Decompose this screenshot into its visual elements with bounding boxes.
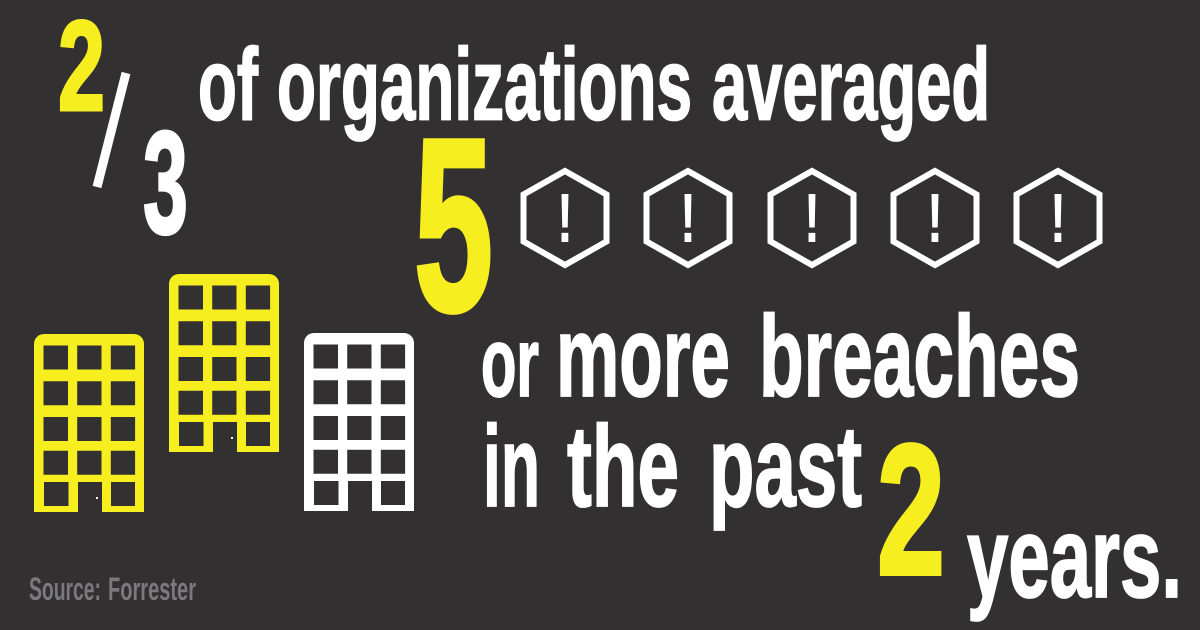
text: in the past: past — [709, 403, 862, 531]
headline: of organizations averaged: of — [198, 28, 259, 142]
icon: alert hexagon 4 — [894, 171, 976, 265]
big number 2: 2 — [877, 407, 945, 614]
icon: alert hexagon 5 — [1016, 171, 1100, 265]
icon: alert hexagon 5: ! — [1050, 179, 1066, 257]
icon: alert hexagon 2: ! — [680, 179, 696, 257]
icon: alert hexagon 4: ! — [927, 179, 943, 257]
icon: yellow building left — [34, 334, 144, 512]
text: more breaches: more — [556, 293, 730, 421]
icon: alert hexagon 2 — [646, 171, 730, 265]
text: or: or — [481, 307, 539, 417]
icon: alert hexagon 1: ! — [557, 179, 573, 257]
icon: white building — [304, 333, 414, 511]
icon: alert hexagon 3: ! — [804, 179, 820, 257]
source credit: Forrester — [108, 571, 196, 607]
fraction two thirds — [58, 0, 188, 264]
breach alert icons — [524, 171, 1100, 265]
headline: of organizations averaged: organizations — [277, 28, 692, 142]
big number 5: 5 — [414, 88, 493, 363]
text: more breaches — [556, 293, 1080, 421]
icon: alert hexagon 3 — [770, 171, 854, 265]
icon: yellow building middle — [169, 274, 279, 452]
icon: alert hexagon 1 — [524, 171, 606, 265]
headline: of organizations averaged: averaged — [712, 28, 990, 142]
text: in the past: in — [483, 403, 540, 531]
source credit: Source: — [29, 571, 101, 607]
text: in the past: the — [567, 403, 679, 531]
text: in the past — [483, 403, 862, 531]
denominator 3: 3 — [143, 101, 188, 264]
fraction slash — [97, 73, 126, 187]
